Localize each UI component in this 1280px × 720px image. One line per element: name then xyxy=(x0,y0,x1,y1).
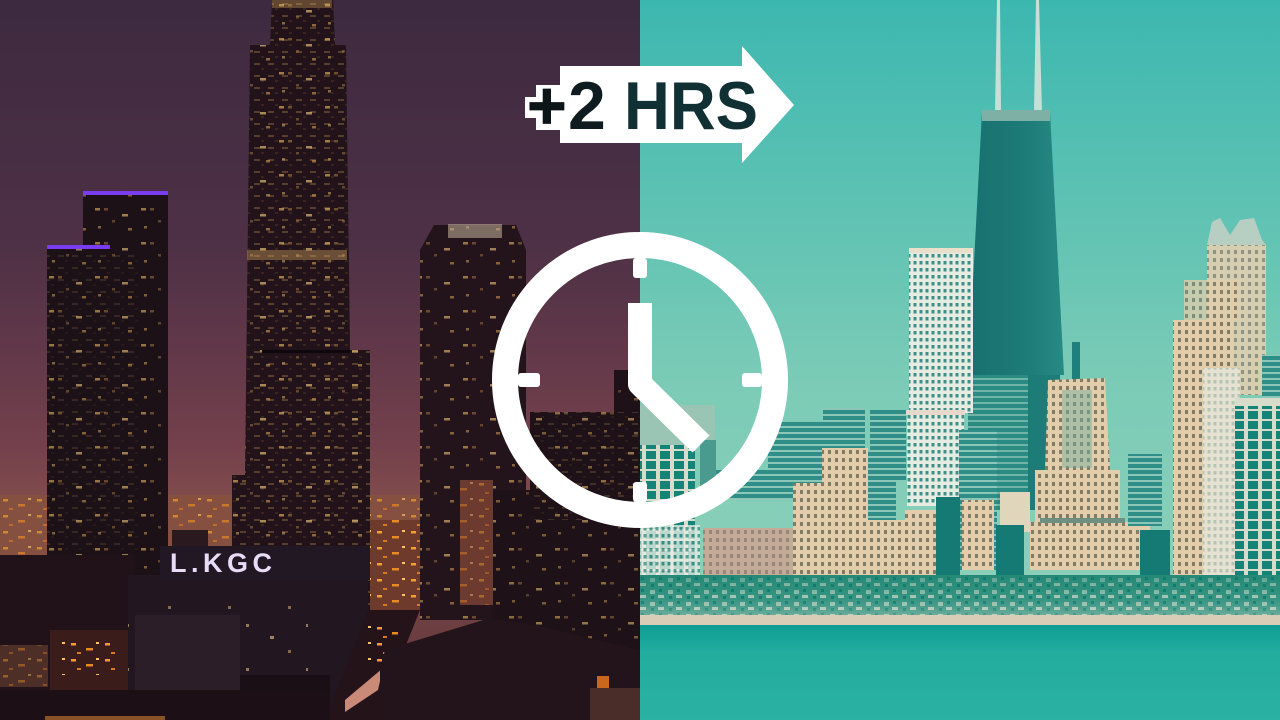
label HRS: HRS xyxy=(624,68,758,144)
building: right tower xyxy=(420,224,526,620)
building: left twin towers xyxy=(47,191,168,620)
clock hands xyxy=(640,303,701,444)
building: far right cluster with crown tops xyxy=(1173,218,1280,583)
rooftop sign: L.KGC xyxy=(170,548,272,578)
arrow badge: +2 HRS xyxy=(525,46,794,163)
distant city lights xyxy=(0,495,640,565)
building: white tower xyxy=(905,248,973,506)
panel: daytime city (right half) xyxy=(640,0,1280,720)
hour ticks xyxy=(518,258,762,502)
building: dark tapered skyscraper with antennas xyxy=(968,0,1080,510)
building: foreground dark tower by the divider xyxy=(493,370,640,660)
purple roof light xyxy=(47,245,110,249)
building: tall central tower xyxy=(232,0,370,620)
digit 2: 2 xyxy=(568,68,606,144)
purple roof light xyxy=(83,191,168,195)
low-rise buildings xyxy=(640,405,1170,590)
plus sign: + xyxy=(527,68,567,144)
building: art deco tower xyxy=(1030,378,1162,570)
icon: clock xyxy=(505,245,775,515)
shoreline trees xyxy=(640,575,1280,616)
clock ring xyxy=(505,245,775,515)
night sky xyxy=(0,0,640,720)
lake water xyxy=(640,625,1280,720)
panel: night city (left half) xyxy=(0,0,640,720)
beach strip xyxy=(640,615,1280,625)
teal sky xyxy=(640,0,1280,625)
foreground low-rise city xyxy=(0,520,640,720)
arrow shape xyxy=(525,46,794,163)
